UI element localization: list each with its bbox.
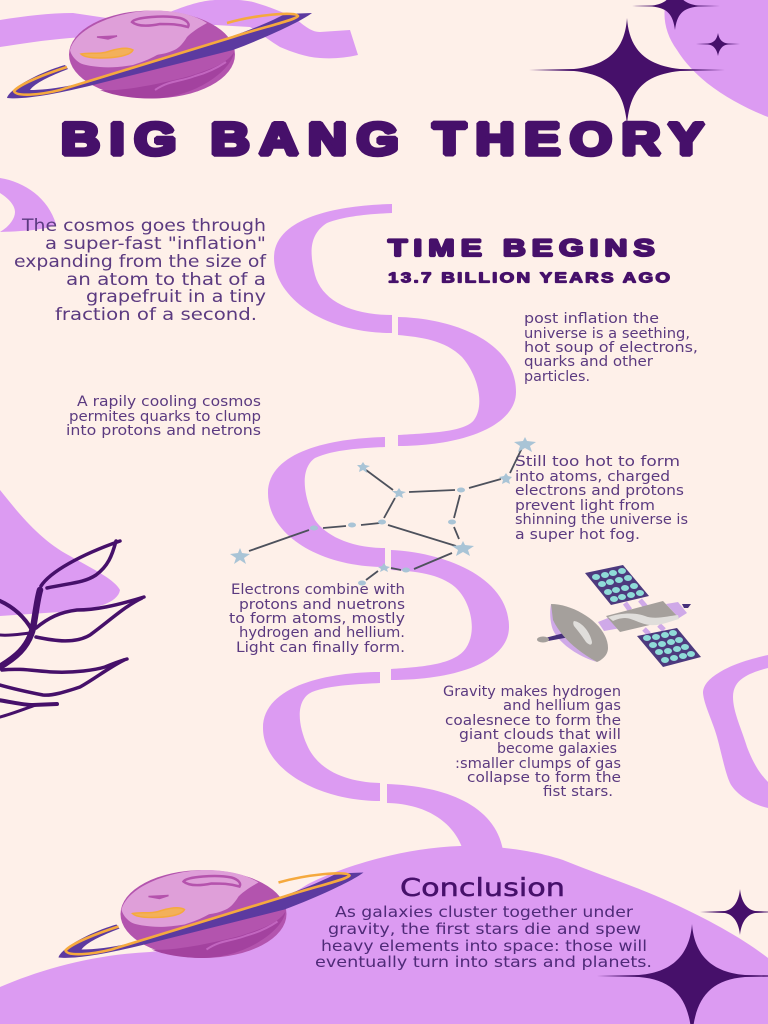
text: post inflation: particles. — [524, 369, 590, 385]
text: inflation: an atom to that of a — [66, 270, 266, 290]
blob: left middle — [0, 490, 120, 616]
bottom planet ring — [58, 872, 364, 958]
planet: bottom — [58, 870, 364, 958]
ribbon segment 6 — [387, 784, 503, 850]
ribbon segment 4 — [391, 550, 509, 680]
text: gravity — [443, 684, 621, 800]
text: hot fog: electrons and protons — [515, 483, 684, 499]
text: conclusion: eventually turn into stars and planets. — [315, 953, 652, 971]
text: gravity: coalesnece to form the — [445, 713, 621, 729]
text: hot fog: a super hot fog. — [515, 527, 640, 543]
text: electrons combine: to form atoms, mostly — [229, 611, 405, 627]
star: bottom small — [700, 889, 768, 935]
text: electrons combine: Light can finally form. — [236, 640, 405, 656]
constellation — [230, 437, 536, 586]
text: hot fog: shinning the universe is — [515, 512, 688, 528]
text: post inflation: post inflation the — [524, 311, 659, 327]
text: inflation: grapefruit in a tiny — [86, 287, 266, 307]
text: electrons combine: protons and nuetrons — [239, 597, 405, 613]
ribbon: top wave — [0, 0, 358, 58]
text: gravity: :smaller clumps of gas — [455, 756, 621, 772]
ribbon segment 2 — [398, 317, 516, 446]
ribbon segment 1 — [274, 204, 392, 333]
text: conclusion — [315, 903, 652, 971]
text: inflation: a super-fast "inflation" — [45, 234, 266, 254]
text: quarks clump: into protons and netrons — [66, 423, 261, 439]
text: inflation — [14, 216, 267, 325]
text: hot fog: prevent light from — [515, 498, 655, 514]
text: post inflation — [524, 311, 698, 385]
text: gravity: fist stars. — [543, 784, 613, 800]
timeline ribbon — [263, 204, 516, 850]
text: hot fog — [515, 454, 688, 543]
text: electrons combine: hydrogen and hellium. — [239, 625, 405, 641]
text: inflation: expanding from the size of — [14, 252, 267, 272]
bottom planet body — [120, 870, 286, 958]
text: electrons combine: Electrons combine with — [231, 582, 405, 598]
text: conclusion: As galaxies cluster together under — [335, 903, 634, 921]
text: gravity: become galaxies — [497, 741, 617, 757]
title: BIG BANG THEORY — [61, 114, 704, 164]
icon: satellite — [537, 565, 701, 667]
icon: leaf branch — [0, 541, 144, 717]
ribbon segment 3 — [268, 437, 385, 567]
subheading: 13.7 billion years ago: 13.7 BILLION YEARS AGO — [388, 269, 670, 286]
blob: bottom hill — [0, 846, 768, 1024]
star: bottom large — [597, 924, 768, 1024]
text: inflation: fraction of a second. — [55, 305, 257, 325]
blob: top right — [664, 0, 768, 117]
text: hot fog: Still too hot to form — [515, 454, 680, 470]
text: gravity: collapse to form the — [467, 770, 621, 786]
blob: right lower — [703, 655, 768, 808]
planet ring — [7, 13, 312, 98]
heading: time begins: TIME BEGINS — [388, 235, 655, 261]
text: inflation: The cosmos goes through — [21, 216, 266, 236]
ribbon segment 5 — [263, 672, 380, 801]
text: gravity: and hellium gas — [503, 698, 621, 714]
planet: top — [7, 10, 312, 99]
star: top small — [632, 0, 720, 30]
text: post inflation: quarks and other — [524, 354, 653, 370]
text: post inflation: universe is a seething, — [524, 326, 690, 342]
text: electrons combine — [229, 582, 405, 656]
blob: left upper — [0, 178, 56, 232]
text: hot fog: into atoms, charged — [515, 469, 670, 485]
heading: conclusion: Conclusion — [400, 873, 565, 902]
text: post inflation: hot soup of electrons, — [524, 340, 698, 356]
star: top tiny — [696, 33, 740, 56]
text: gravity: Gravity makes hydrogen — [443, 684, 621, 700]
star: top large — [529, 18, 725, 124]
text: gravity: giant clouds that will — [459, 727, 621, 743]
planet body — [69, 10, 235, 98]
text: quarks clump — [66, 394, 261, 439]
text: quarks clump: A rapily cooling cosmos — [77, 394, 261, 410]
text: conclusion: heavy elements into space: those will — [321, 937, 647, 955]
text: quarks clump: permites quarks to clump — [69, 409, 261, 425]
text: conclusion: gravity, the first stars die and spew — [328, 920, 641, 938]
